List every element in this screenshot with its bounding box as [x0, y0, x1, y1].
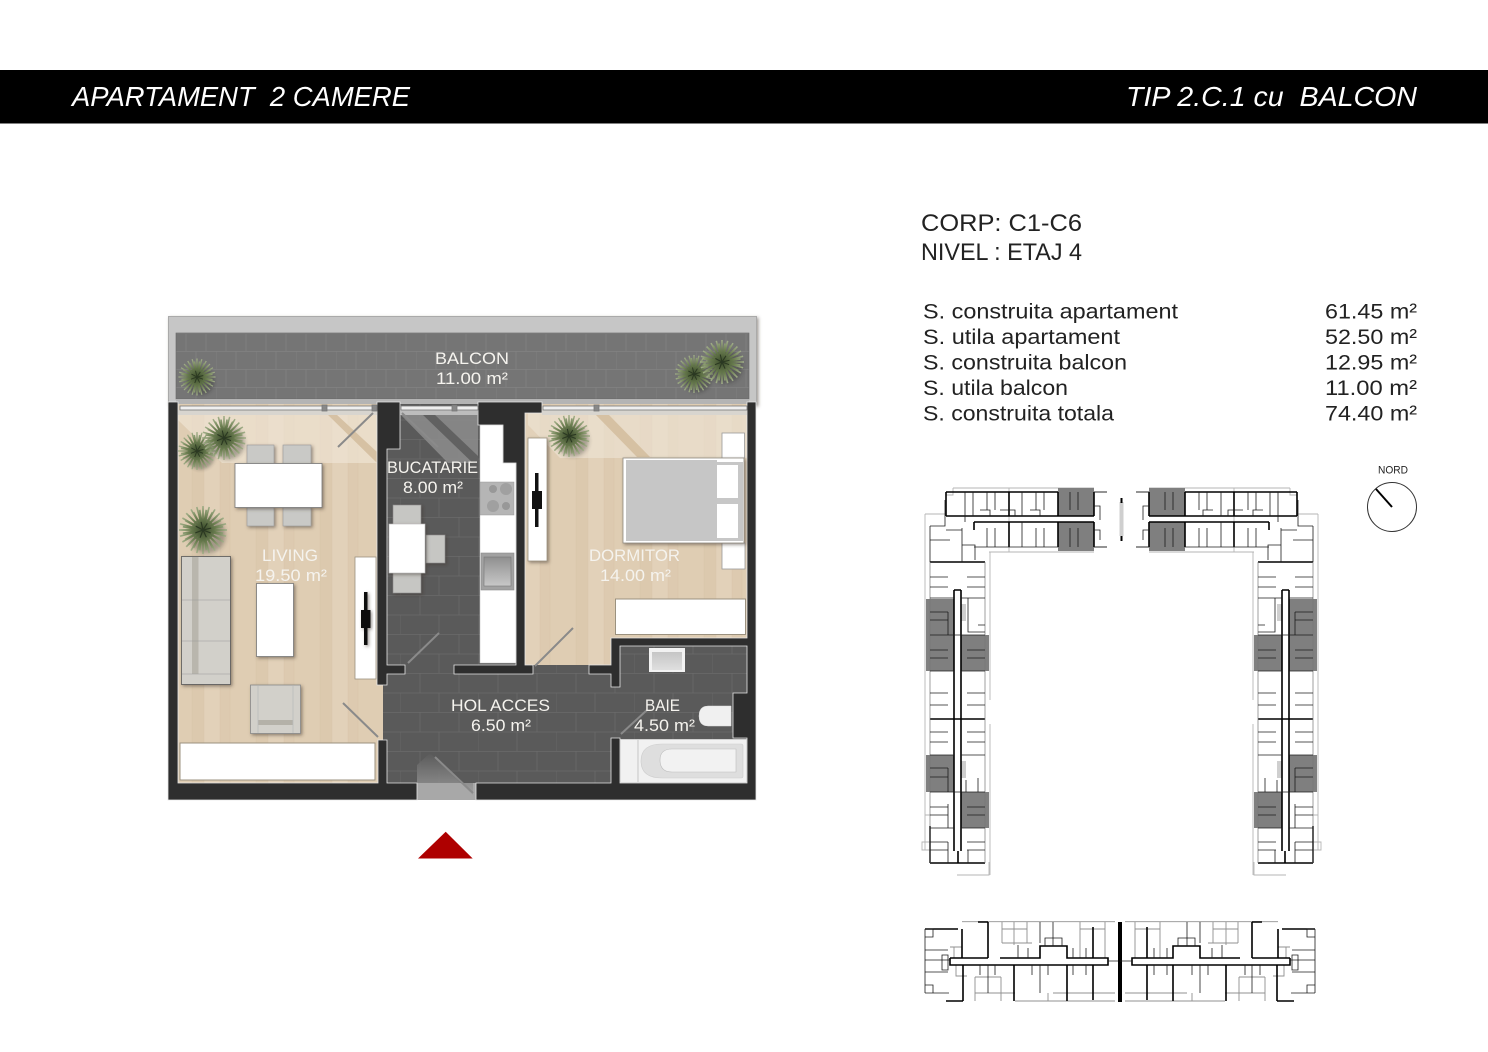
hob [480, 482, 514, 515]
surface values [1325, 300, 1417, 426]
sink [481, 553, 514, 590]
floors [178, 404, 747, 800]
room label: hol acces [451, 696, 550, 735]
balcony [168, 316, 756, 405]
north compass [1368, 464, 1416, 532]
nightstands [722, 433, 745, 569]
surface values: 74.40 m² [1325, 402, 1417, 426]
room label: baie [634, 696, 695, 735]
windows [178, 405, 747, 415]
floor plan [168, 316, 756, 800]
tv console [528, 438, 547, 561]
room label: baie: BAIE [645, 696, 680, 715]
room label: bucatarie: BUCATARIE [387, 458, 478, 477]
room label: hol acces: 6.50 m² [471, 716, 531, 735]
room label: bucatarie [387, 458, 478, 497]
room label: balcon: BALCON [435, 349, 509, 368]
walls [168, 402, 756, 800]
surface labels [923, 300, 1178, 426]
building info: NIVEL : ETAJ 4 [921, 239, 1082, 266]
room label: balcon [435, 349, 509, 388]
room label: dormitor [589, 546, 680, 585]
key plan: floor level [922, 488, 1321, 875]
entrance arrow [418, 832, 473, 858]
room label: dormitor: DORMITOR [589, 546, 680, 565]
tv [532, 473, 542, 527]
kitchen chairs [393, 505, 445, 593]
wardrobe [616, 599, 746, 634]
header band [0, 70, 1488, 124]
coffee table [256, 584, 294, 656]
building info [921, 210, 1082, 266]
building info: CORP: C1-C6 [921, 210, 1082, 237]
key plan: building elevation [925, 922, 1315, 1002]
room label: baie: 4.50 m² [634, 716, 695, 735]
surface values: 12.95 m² [1325, 352, 1417, 374]
apartment type: TIP 2.C.1 cu BALCON [1126, 81, 1418, 112]
bedroom furniture [528, 433, 746, 634]
plants [178, 340, 744, 554]
room label: living [255, 546, 327, 585]
tv console [355, 557, 376, 679]
dining chairs [247, 445, 311, 526]
surface values: 61.45 m² [1325, 300, 1417, 323]
surface labels: S. construita balcon [923, 352, 1127, 374]
sofa [182, 556, 230, 684]
room label: living: LIVING [262, 546, 318, 565]
doors [338, 413, 647, 793]
dining table [235, 464, 322, 508]
surface labels: S. construita apartament [923, 300, 1178, 323]
room label: hol acces: HOL ACCES [451, 696, 550, 715]
washbasin [649, 648, 685, 672]
room label: bucatarie: 8.00 m² [403, 478, 463, 497]
kitchen furniture [389, 425, 516, 663]
tv [361, 592, 370, 645]
kitchen counter [480, 425, 516, 663]
kitchen table [389, 524, 425, 573]
bed [623, 458, 744, 543]
room label: living: 19.50 m² [255, 566, 327, 585]
surface labels: S. utila apartament [923, 326, 1120, 349]
armchair [250, 685, 300, 734]
surface values: 11.00 m² [1325, 377, 1417, 400]
surface values: 52.50 m² [1325, 326, 1417, 349]
toilet [699, 706, 731, 726]
surface labels: S. construita totala [923, 402, 1114, 426]
bathroom fixtures [620, 648, 746, 782]
bathtub [620, 740, 746, 782]
room label: balcon: 11.00 m² [436, 369, 508, 388]
living furniture [180, 445, 376, 780]
wardrobe [180, 743, 375, 780]
room label: dormitor: 14.00 m² [600, 566, 671, 585]
surface labels: S. utila balcon [923, 377, 1068, 400]
title: APARTAMENT 2 CAMERE [70, 81, 410, 112]
north compass: NORD [1378, 464, 1408, 476]
